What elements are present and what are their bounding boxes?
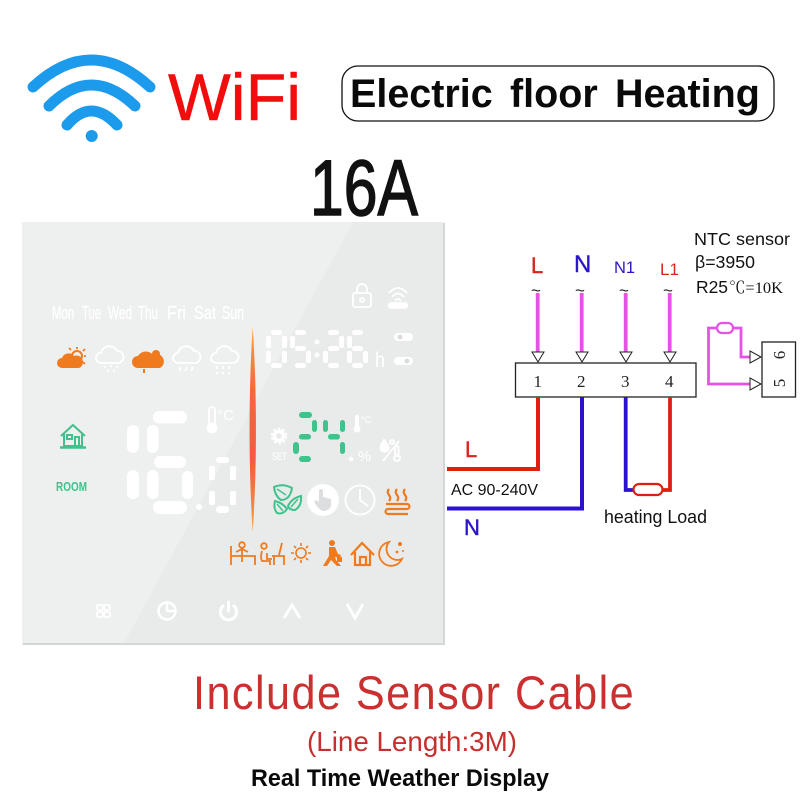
button: menu grid bbox=[97, 605, 110, 617]
icon: eco leaves bbox=[274, 485, 301, 514]
icon: floor heating bbox=[386, 489, 410, 514]
text: NTC sensor specification bbox=[694, 229, 790, 297]
label: heating Load: heating Load bbox=[604, 507, 707, 527]
text: NTC sensor specification: R25 bbox=[696, 277, 728, 297]
button: up bbox=[284, 605, 300, 618]
wiring: terminal block 1 to 4: 3 bbox=[621, 372, 630, 391]
set temperature digits 24 bbox=[293, 412, 345, 462]
icon: small thermometer: °C bbox=[361, 415, 372, 425]
label: supply N: N bbox=[464, 515, 480, 540]
icon: thermometer with degrees C bbox=[208, 407, 234, 432]
button: down bbox=[347, 604, 363, 618]
wiring: terminal block 1 to 4: 2 bbox=[577, 372, 586, 391]
text: NTC sensor specification: ℃=10K bbox=[729, 280, 783, 297]
wiring: neutral supply line bbox=[447, 397, 582, 508]
wiring: live supply line bbox=[447, 397, 538, 469]
icon: partly sunny, Monday bbox=[57, 347, 86, 368]
heading: WiFi: WiFi bbox=[168, 60, 301, 134]
weekday labels: Thu bbox=[138, 303, 158, 323]
heading: 16A: 16A bbox=[310, 143, 418, 232]
wiring: NTC sensor circuit: 6 bbox=[770, 351, 789, 359]
heading badge: Electric floor Heating: Heating bbox=[615, 72, 760, 116]
wiring: heating load circuit bbox=[626, 397, 670, 495]
weekday labels: Mon bbox=[52, 303, 74, 323]
wiring: terminal input labels bbox=[531, 251, 679, 300]
heating indicator bar bbox=[250, 327, 256, 532]
icon: cloud with heavy rain bbox=[211, 346, 239, 374]
weekday labels bbox=[52, 303, 244, 323]
weekday labels: Sat bbox=[194, 303, 216, 323]
wiring: NTC sensor circuit bbox=[708, 323, 796, 397]
icon: wake up bed bbox=[231, 542, 255, 565]
wiring: terminal block 1 to 4: 4 bbox=[665, 372, 674, 391]
caption: Real Time Weather Display: Real Time Weather Display bbox=[251, 765, 549, 792]
unit: percent bbox=[349, 448, 371, 465]
icon: person leaving with briefcase bbox=[323, 540, 342, 566]
wiring: terminal input labels: N bbox=[574, 251, 591, 278]
icon: moon and stars bbox=[379, 542, 404, 566]
room temperature digits bbox=[127, 411, 236, 514]
wiring: terminal input labels: ~ bbox=[663, 281, 673, 300]
caption: Include Sensor Cable: Include Sensor Cable bbox=[193, 666, 634, 719]
label: supply L: L bbox=[465, 437, 477, 462]
on and off toggles bbox=[394, 333, 413, 365]
icon: sun bbox=[291, 543, 311, 563]
wiring: terminal input labels: L bbox=[531, 253, 543, 278]
heading badge: Electric floor Heating bbox=[342, 66, 774, 121]
wiring: terminal input labels: ~ bbox=[531, 281, 541, 300]
icon: humidity and temperature bbox=[380, 440, 400, 461]
wiring: terminal input labels: ~ bbox=[575, 281, 585, 300]
icon: home bbox=[351, 543, 374, 565]
icon: cloud with sun bbox=[132, 350, 164, 373]
weekday labels: Fri bbox=[167, 303, 186, 323]
weekday labels: Sun bbox=[222, 303, 244, 323]
icon: settings gear bbox=[272, 429, 286, 443]
panel: thermostat bbox=[22, 222, 445, 645]
icon: wifi router bbox=[389, 288, 407, 308]
caption: Line Length: (Line Length:3M) bbox=[307, 726, 517, 757]
heading badge: Electric floor Heating: Electric bbox=[350, 72, 493, 116]
icon: small thermometer bbox=[354, 415, 372, 432]
unit: percent: % bbox=[358, 448, 371, 465]
text: NTC sensor specification: NTC sensor bbox=[694, 229, 790, 249]
wiring: terminal block 1 to 4: 1 bbox=[534, 372, 542, 391]
label: AC 90-240V: AC 90-240V bbox=[451, 482, 538, 499]
weekday labels: Wed bbox=[108, 303, 132, 323]
weekday labels: Tue bbox=[82, 303, 101, 323]
wiring: pink input lines with arrows bbox=[532, 293, 676, 362]
clock digits 05:26 bbox=[266, 330, 385, 372]
clock digits 05:26: h bbox=[375, 349, 385, 372]
label: ROOM: ROOM bbox=[56, 480, 87, 494]
button: power bbox=[220, 602, 236, 620]
wiring: terminal input labels: L1 bbox=[660, 260, 679, 279]
icon: cloud with rain bbox=[173, 346, 201, 371]
text: NTC sensor specification: β=3950 bbox=[695, 252, 755, 272]
icon: WiFi signal bbox=[33, 60, 150, 142]
icon: touch hand in white circle bbox=[307, 484, 339, 516]
wiring: NTC sensor circuit: 5 bbox=[770, 379, 789, 387]
icon: lock bbox=[353, 284, 371, 307]
button: schedule bbox=[158, 602, 176, 620]
label: SET: SET bbox=[272, 451, 287, 463]
wiring: terminal block 1 to 4 bbox=[516, 363, 696, 397]
icon: cloud with snow bbox=[96, 346, 124, 371]
icon: room house bbox=[60, 425, 86, 448]
wiring: terminal input labels: N1 bbox=[614, 259, 635, 277]
icon: clock bbox=[346, 486, 374, 514]
heading badge: Electric floor Heating: floor bbox=[510, 72, 598, 116]
wiring: terminal input labels: ~ bbox=[619, 281, 629, 300]
icon: desk worker bbox=[261, 543, 284, 565]
icon: thermometer with degrees C: °C bbox=[217, 407, 234, 424]
